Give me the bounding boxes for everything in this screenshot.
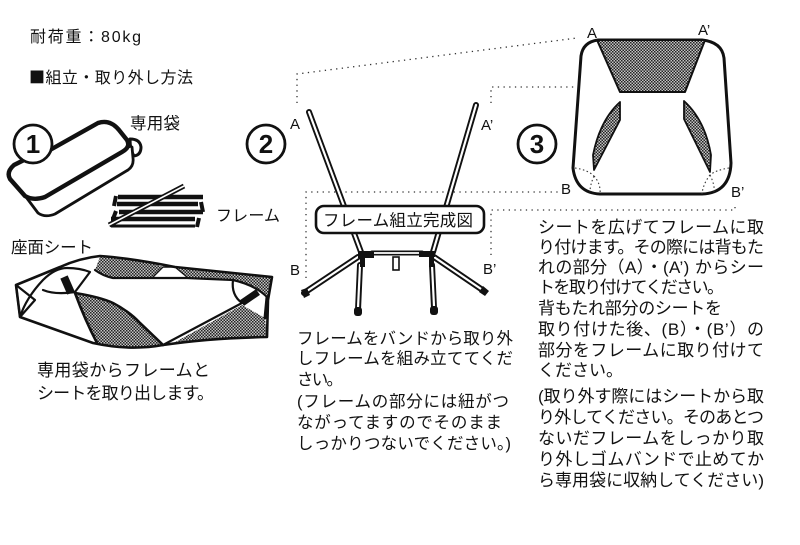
step 3 number badge: 3 xyxy=(530,129,544,159)
label: frame: フレーム xyxy=(216,208,280,225)
hatched back panel xyxy=(597,40,705,92)
text: step 3 instructions: ください。 xyxy=(538,361,623,380)
labels: sheet points: A’ xyxy=(698,22,710,39)
labels: frame points: A xyxy=(290,116,300,133)
icon: bag strap xyxy=(130,139,141,156)
labels: frame points xyxy=(290,116,496,279)
labels: sheet points: B’ xyxy=(731,184,744,201)
hatched seat panel right xyxy=(170,305,267,345)
text: step 3 instructions: り外してください。そのあとつ xyxy=(538,408,764,427)
step 1 number badge xyxy=(14,125,52,163)
dotted corner seams xyxy=(575,168,729,194)
text: step 2 instructions: さい。 xyxy=(297,370,343,389)
callout: frame assembly complete: フレーム組立完成図 xyxy=(323,211,473,230)
seat sheet flat illustration xyxy=(573,40,731,194)
text: step 2 instructions: しっかりつないでください。) xyxy=(297,434,511,453)
text: step 3 instructions: シートを広げてフレームに取 xyxy=(538,218,764,237)
text: step 1 instructions xyxy=(37,361,214,403)
text: step 3 instructions xyxy=(538,218,764,490)
hatched seat panel left xyxy=(75,293,163,347)
load capacity text: 耐荷重：80kg xyxy=(30,28,141,46)
dotted connector lines xyxy=(297,38,735,278)
text: step 3 instructions: 部分をフレームに取り付けて xyxy=(538,341,764,360)
text: step 3 instructions: 取り付けた後、(B）・(B’）の xyxy=(538,320,764,339)
frame joints and feet xyxy=(301,251,489,316)
text: step 3 instructions: (取り外す際にはシートから取 xyxy=(538,387,764,406)
seat sheet illustration xyxy=(16,256,272,348)
frame poles xyxy=(304,105,484,310)
text: step 2 instructions xyxy=(297,329,514,453)
text: step 3 instructions: れの部分（A）・(A’) からシー xyxy=(538,258,764,277)
hatched side panel right xyxy=(684,101,711,172)
labels: sheet points xyxy=(561,22,744,201)
frame bundle illustration xyxy=(109,186,203,227)
step 1: carry bag illustration xyxy=(9,122,141,216)
hatched back panel xyxy=(95,257,272,297)
labels: frame points: B xyxy=(290,262,300,279)
step 2 number badge: 2 xyxy=(259,129,273,159)
black strap left xyxy=(64,277,71,293)
text: step 2 instructions: フレームをバンドから取り外 xyxy=(297,329,514,348)
center tab xyxy=(393,257,399,270)
text: step 3 instructions: り外しゴムバンドで止めてか xyxy=(538,449,764,469)
sheet outline and seams xyxy=(16,256,272,348)
icon: bag lid xyxy=(9,122,128,199)
text: step 2 instructions: (フレームの部分には紐がつ xyxy=(297,392,509,411)
step 2 number badge xyxy=(247,125,285,163)
label: seat sheet: 座面シート xyxy=(11,238,93,257)
black strap right xyxy=(242,292,258,303)
section heading: ■組立・取り外し方法 xyxy=(29,64,193,88)
text: step 1 instructions: シートを取り出します。 xyxy=(37,384,214,403)
text: step 2 instructions: ながってますのでそのまま xyxy=(297,413,502,432)
text: step 3 instructions: り付けます。その際には背もた xyxy=(538,238,764,257)
labels: frame points: B’ xyxy=(483,261,496,278)
text: step 2 instructions: しフレームを組み立ててくだ xyxy=(297,349,513,368)
labels: frame points: A’ xyxy=(481,117,493,134)
text: step 3 instructions: ら専用袋に収納してください) xyxy=(538,471,764,490)
assembled frame illustration xyxy=(301,105,489,316)
step 1 number badge: 1 xyxy=(26,129,40,159)
sheet outline xyxy=(573,40,731,194)
step 3 number badge xyxy=(518,125,556,163)
text: step 3 instructions: トを取り付けてください。 xyxy=(538,278,724,297)
callout: frame assembly complete xyxy=(316,206,484,233)
labels: sheet points: A xyxy=(587,25,597,42)
text: step 3 instructions: 背もたれ部分のシートを xyxy=(538,299,722,318)
labels: sheet points: B xyxy=(561,181,571,198)
text: step 3 instructions: ないだフレームをしっかり取 xyxy=(538,429,764,448)
label: carry bag: 専用袋 xyxy=(130,114,180,133)
hatched side panel left xyxy=(593,102,620,170)
icon: bag body xyxy=(26,147,133,216)
text: step 1 instructions: 専用袋からフレームと xyxy=(37,361,210,380)
